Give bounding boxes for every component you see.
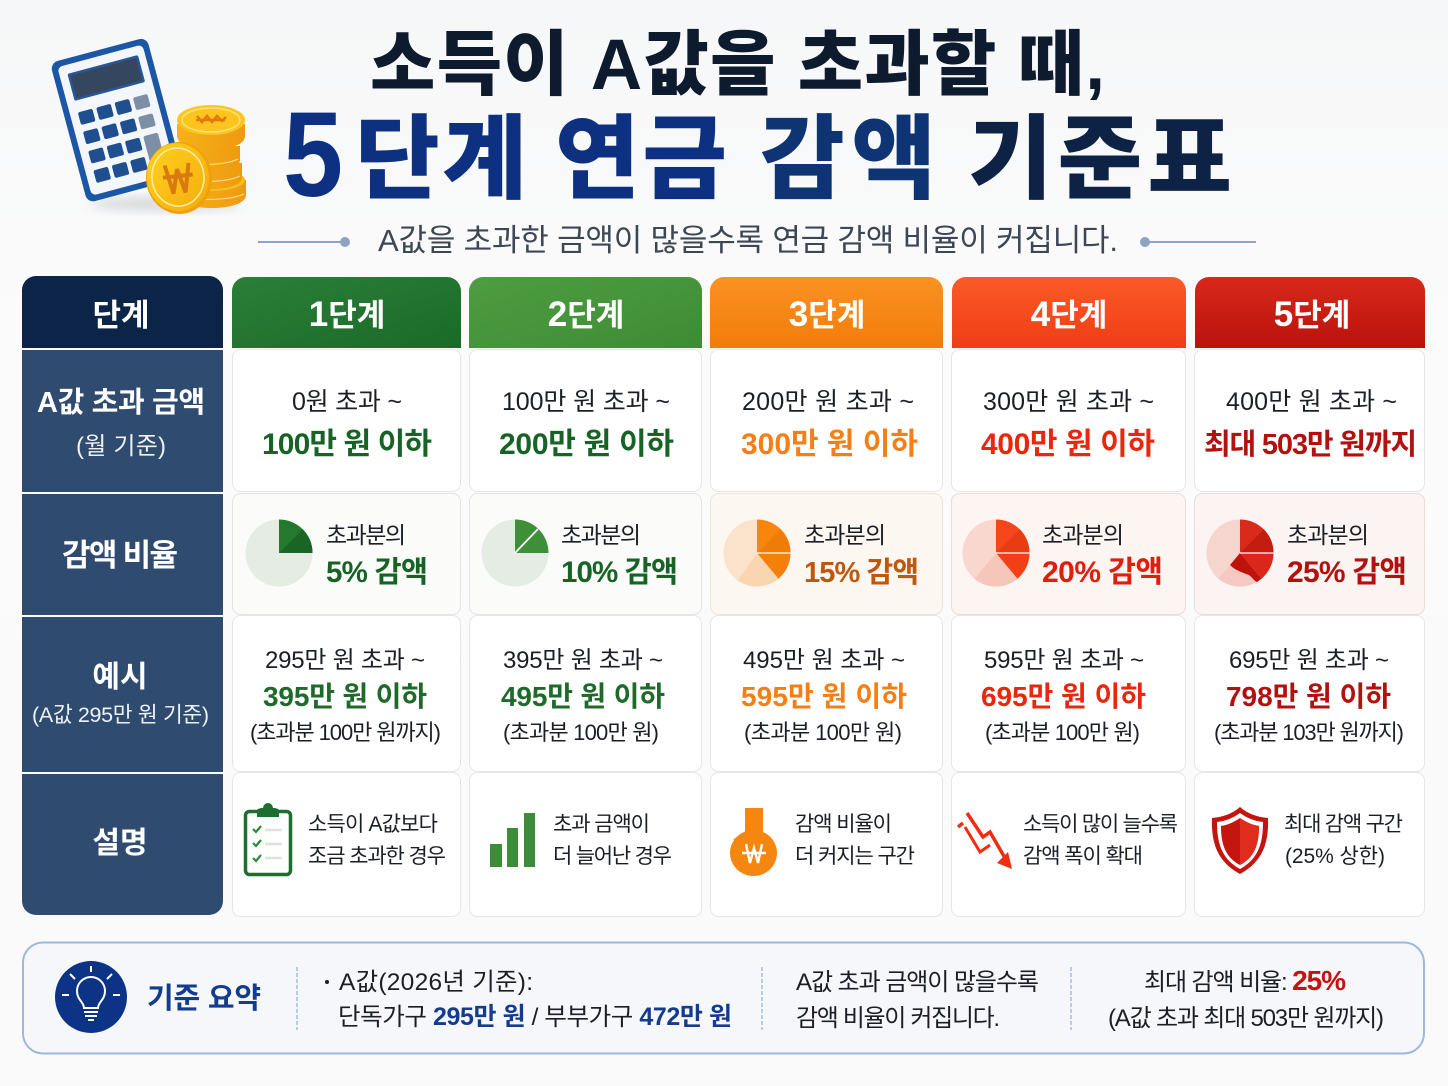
cell: reduction rate: [232, 494, 460, 614]
cell: reduction rate: 25% 감액: [1287, 556, 1407, 589]
cell: reduction rate: 20% 감액: [1042, 556, 1163, 589]
header: stage 4: 4단계: [1031, 295, 1107, 334]
panel: row labels column: [22, 276, 223, 915]
cell: description: (25% 상한): [1285, 845, 1385, 868]
text block: trend note: [796, 969, 1039, 1032]
cell: description: 조금 초과한 경우: [308, 845, 446, 868]
header: stage 2: [469, 277, 702, 348]
cell: excess amount: [232, 350, 460, 492]
heading: criteria summary: 기준 요약: [147, 982, 261, 1015]
header: stage 4: [952, 277, 1186, 348]
cell: example: (초과분 100만 원): [744, 720, 902, 745]
cell: description: [232, 772, 460, 916]
cell: example: 595만 원 초과 ~: [984, 647, 1144, 674]
icon: rising bars: [490, 813, 535, 867]
cell: description: 감액 비율이: [795, 813, 892, 836]
chart: 5% pie: [246, 520, 312, 586]
cell: excess amount: 0원 초과 ~: [292, 388, 402, 416]
chart: 25% pie: [1206, 520, 1274, 587]
cell: example: 295만 원 초과 ~: [265, 647, 425, 674]
cell: description: 더 늘어난 경우: [553, 845, 672, 868]
cell: example: (초과분 100만 원): [503, 720, 659, 745]
row label: description: [22, 774, 223, 915]
cell: description: 소득이 A값보다: [308, 813, 438, 836]
row label: description: 설명: [92, 827, 148, 860]
icon: won coin: [142, 139, 216, 217]
cell: excess amount: 200만 원 이하: [499, 428, 674, 461]
cell: example: [710, 616, 942, 772]
cell: example: 395만 원 이하: [263, 681, 427, 712]
row label: reduction rate: 감액 비율: [62, 538, 178, 573]
cell: reduction rate: 10% 감액: [561, 556, 678, 589]
cell: description: 더 커지는 구간: [795, 845, 915, 868]
cell: description: [710, 772, 942, 916]
text block: maximum rate: (A값 초과 최대 503만 원까지): [1108, 1005, 1384, 1032]
cell: description: [470, 772, 702, 916]
row label: stage header: 단계: [92, 298, 150, 333]
title: [283, 26, 1232, 222]
cell: example: (초과분 100만 원까지): [250, 720, 441, 745]
subtitle with side ornaments: A값을 초과한 금액이 많을수록 연금 감액 비율이 커집니다.: [378, 223, 1118, 258]
icon: calculator: [50, 37, 184, 203]
icon: light bulb: [55, 961, 127, 1033]
cell: description: 초과 금액이: [553, 813, 650, 836]
chart: 20% pie: [962, 520, 1030, 587]
cell: example: 395만 원 초과 ~: [503, 647, 663, 674]
cell: example: [952, 616, 1186, 772]
title line 2: 감액: [760, 109, 936, 211]
cell: reduction rate: 5% 감액: [326, 556, 428, 589]
cell: description: 소득이 많이 늘수록: [1023, 813, 1178, 836]
text block: trend note: 감액 비율이 커집니다.: [796, 1005, 1000, 1032]
icon: shield: [1212, 807, 1268, 874]
panel: stage 1 column: [232, 277, 461, 916]
cell: description: [952, 772, 1186, 916]
icon: coin stack: [177, 105, 246, 208]
text block: A value: 단독가구 295만 원 / 부부가구 472만 원: [338, 1003, 732, 1031]
text block: maximum rate: [1108, 965, 1384, 1032]
text block: A value: [325, 968, 732, 1031]
icon: falling arrow: [958, 813, 1012, 869]
cell: reduction rate: 초과분의: [1042, 522, 1124, 548]
icon: calculator with coins: [50, 37, 246, 217]
cell: reduction rate: 초과분의: [326, 522, 406, 548]
row label: stage header: [22, 276, 223, 348]
chart: 10% pie: [482, 520, 548, 586]
row label: example: [22, 617, 223, 772]
title line 2: 연금: [555, 109, 727, 211]
panel: stage 3 column: [710, 277, 943, 916]
cell: example: 595만 원 이하: [741, 681, 907, 712]
cell: excess amount: 400만 원 초과 ~: [1226, 388, 1397, 416]
row label: example: (A값 295만 원 기준): [32, 703, 209, 727]
title line 2: 5: [283, 87, 343, 222]
title line 2: 단계: [355, 109, 527, 211]
cell: excess amount: [952, 350, 1186, 492]
row label: reduction rate: [22, 494, 223, 615]
header: stage 5: 5단계: [1274, 295, 1350, 334]
cell: example: (초과분 100만 원): [985, 720, 1140, 745]
cell: excess amount: 100만 원 이하: [262, 428, 432, 461]
cell: reduction rate: 초과분의: [561, 522, 641, 548]
header: stage 1: 1단계: [309, 295, 385, 334]
title line 2: 기준표: [968, 109, 1232, 211]
header: stage 3: [710, 277, 943, 348]
cell: reduction rate: [470, 494, 702, 614]
cell: reduction rate: 초과분의: [804, 522, 886, 548]
icon: clipboard checklist: [246, 803, 290, 874]
text block: A value: A값(2026년 기준):: [339, 968, 533, 996]
cell: reduction rate: 초과분의: [1287, 522, 1369, 548]
cell: excess amount: 300만 원 이하: [741, 428, 918, 461]
header: stage 1: [232, 277, 461, 348]
text block: maximum rate: 최대 감액 비율: 25%: [1144, 965, 1346, 996]
cell: excess amount: 300만 원 초과 ~: [983, 388, 1154, 416]
cell: excess amount: 100만 원 초과 ~: [502, 388, 670, 416]
cell: example: 695만 원 이하: [981, 681, 1146, 712]
cell: description: 감액 폭이 확대: [1023, 845, 1143, 868]
cell: description: 최대 감액 구간: [1284, 813, 1403, 836]
cell: example: [1194, 616, 1424, 772]
cell: excess amount: [710, 350, 942, 492]
cell: reduction rate: 15% 감액: [804, 556, 919, 589]
row label: example: 예시: [92, 661, 148, 694]
cell: excess amount: [470, 350, 702, 492]
header: stage 3: 3단계: [789, 295, 865, 334]
panel: stage 4 column: [952, 277, 1186, 916]
panel: criteria summary: [23, 942, 1424, 1054]
row label: excess amount: [22, 350, 223, 492]
cell: excess amount: 400만 원 이하: [981, 428, 1155, 461]
header: stage 5: [1195, 277, 1425, 348]
cell: reduction rate: [952, 494, 1186, 614]
cell: excess amount: 최대 503만 원까지: [1204, 428, 1417, 461]
cell: reduction rate: [710, 494, 942, 614]
header: stage 2: 2단계: [548, 295, 624, 334]
cell: example: 798만 원 이하: [1226, 681, 1391, 712]
cell: example: [470, 616, 702, 772]
row label: excess amount: (월 기준): [76, 433, 166, 460]
text block: trend note: A값 초과 금액이 많을수록: [796, 969, 1039, 996]
icon: money bag with won sign: [730, 808, 777, 876]
panel: stage 5 column: [1194, 277, 1425, 916]
cell: example: [232, 616, 460, 772]
title line 1: 소득이 A값을 초과할 때,: [370, 26, 1105, 105]
panel: stage 2 column: [469, 277, 702, 916]
cell: example: 695만 원 초과 ~: [1229, 647, 1389, 674]
cell: example: 495만 원 이하: [501, 681, 665, 712]
cell: excess amount: 200만 원 초과 ~: [742, 388, 914, 416]
cell: excess amount: [1194, 350, 1424, 492]
row label: excess amount: A값 초과 금액: [37, 386, 205, 419]
cell: reduction rate: [1194, 494, 1424, 614]
cell: example: (초과분 103만 원까지): [1214, 720, 1404, 745]
chart: 15% pie: [724, 520, 790, 587]
title line 2: [283, 87, 1232, 222]
cell: description: [1194, 772, 1424, 916]
cell: example: 495만 원 초과 ~: [743, 647, 905, 674]
